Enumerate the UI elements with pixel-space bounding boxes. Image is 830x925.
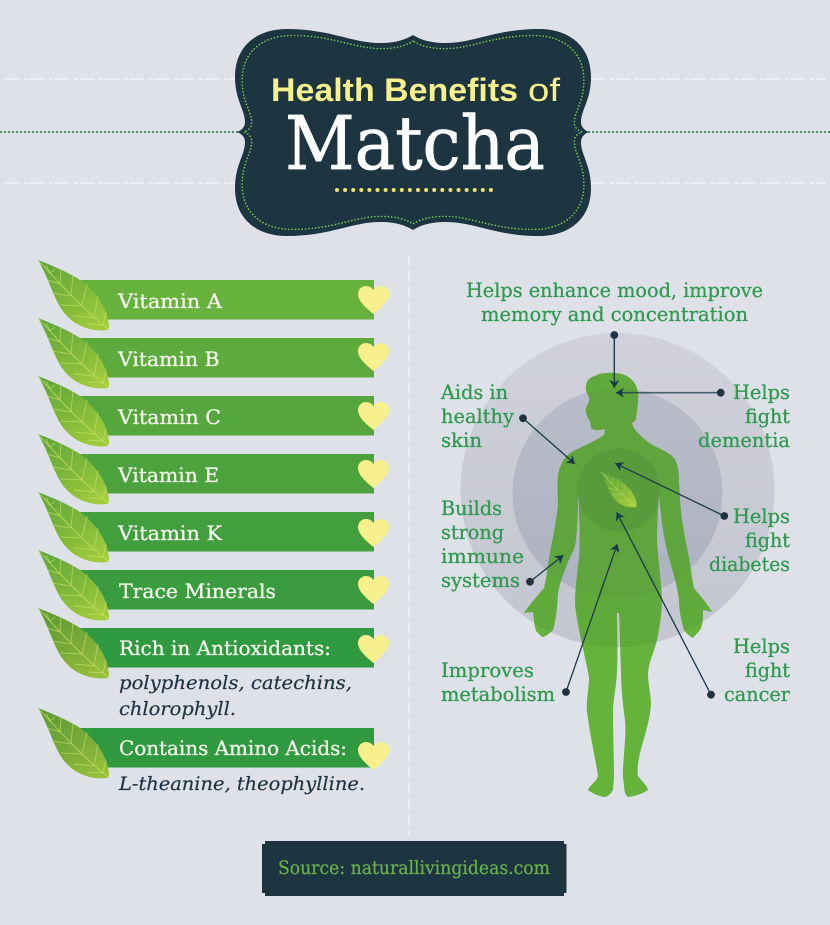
item: Rich in Antioxidants: Rich in Antioxidants: xyxy=(119,636,331,660)
label: diabetes: Helps xyxy=(733,505,790,528)
label: mood: Helps enhance mood, improve xyxy=(466,279,763,302)
heading: Matcha: Matcha xyxy=(285,101,545,187)
arrow: skin xyxy=(519,414,575,464)
label: skin: Aids in xyxy=(440,381,508,404)
label: immune: Builds xyxy=(441,497,502,520)
concentric circles xyxy=(460,333,774,647)
label: cancer: Helps xyxy=(733,635,790,658)
label: immune: immune xyxy=(441,545,524,568)
item: Vitamin K: Vitamin K xyxy=(117,521,223,545)
item: Vitamin E: Vitamin E xyxy=(117,463,219,487)
header rules xyxy=(0,79,830,183)
arrow: immune xyxy=(526,555,563,586)
label: cancer: fight xyxy=(745,659,790,682)
item: Rich in Antioxidants xyxy=(38,608,389,720)
item: Vitamin B xyxy=(38,318,389,388)
panel: body diagram xyxy=(440,279,791,797)
label: metabolism xyxy=(441,659,555,706)
centre divider xyxy=(408,255,410,835)
icon: chest leaf xyxy=(600,472,637,507)
human silhouette xyxy=(524,372,712,797)
item: Vitamin K xyxy=(38,492,389,562)
label: dementia: Helps xyxy=(733,381,790,404)
source box xyxy=(262,841,566,896)
item: Vitamin C xyxy=(38,376,389,446)
label: diabetes: fight xyxy=(745,529,790,552)
source box: Source: naturallivingideas.com xyxy=(278,858,550,879)
item: Rich in Antioxidants: chlorophyll. xyxy=(119,698,236,720)
arrow: dementia xyxy=(616,389,725,397)
arrow: diabetes xyxy=(615,463,728,520)
arrow: cancer xyxy=(617,512,715,699)
item: Vitamin C: Vitamin C xyxy=(117,405,221,429)
label: immune: strong xyxy=(441,521,504,544)
arrows xyxy=(519,331,728,699)
item: Vitamin E xyxy=(38,434,389,504)
item: Contains Amino Acids: Contains Amino Acids: xyxy=(119,736,347,760)
item: Trace Minerals: Trace Minerals xyxy=(119,579,276,603)
label: diabetes xyxy=(709,505,790,576)
label: cancer xyxy=(724,635,791,706)
label: diabetes: diabetes xyxy=(709,553,790,576)
item: Vitamin A xyxy=(38,260,389,330)
label: cancer: cancer xyxy=(724,683,791,706)
label: metabolism: metabolism xyxy=(441,683,555,706)
arrow: mood xyxy=(610,331,618,388)
label: mood: memory and concentration xyxy=(481,303,748,326)
label: skin: healthy xyxy=(441,405,514,428)
label: immune xyxy=(441,497,524,592)
yellow dotted rule xyxy=(337,188,492,192)
label: dementia xyxy=(698,381,790,452)
label: immune: systems xyxy=(441,569,520,592)
heading line: Health Benefits of: Health Benefits xyxy=(271,72,518,108)
label: skin xyxy=(440,381,514,452)
title badge xyxy=(235,29,591,236)
item: Vitamin A: Vitamin A xyxy=(117,289,223,313)
heading line: Health Benefits of: of xyxy=(528,72,560,108)
item: Rich in Antioxidants: polyphenols, catechins, xyxy=(119,672,352,694)
item: Vitamin B: Vitamin B xyxy=(117,347,220,371)
item: Contains Amino Acids xyxy=(38,708,389,795)
arrow: metabolism xyxy=(562,544,617,696)
label: skin: skin xyxy=(441,429,482,452)
panel: nutrient list xyxy=(38,260,389,795)
item: Contains Amino Acids: L-theanine, theophylline. xyxy=(118,773,365,795)
label: dementia: fight xyxy=(745,405,790,428)
label: dementia: dementia xyxy=(698,429,790,452)
label: metabolism: Improves xyxy=(441,659,534,682)
label: mood xyxy=(466,279,763,326)
item: Trace Minerals xyxy=(38,550,389,620)
